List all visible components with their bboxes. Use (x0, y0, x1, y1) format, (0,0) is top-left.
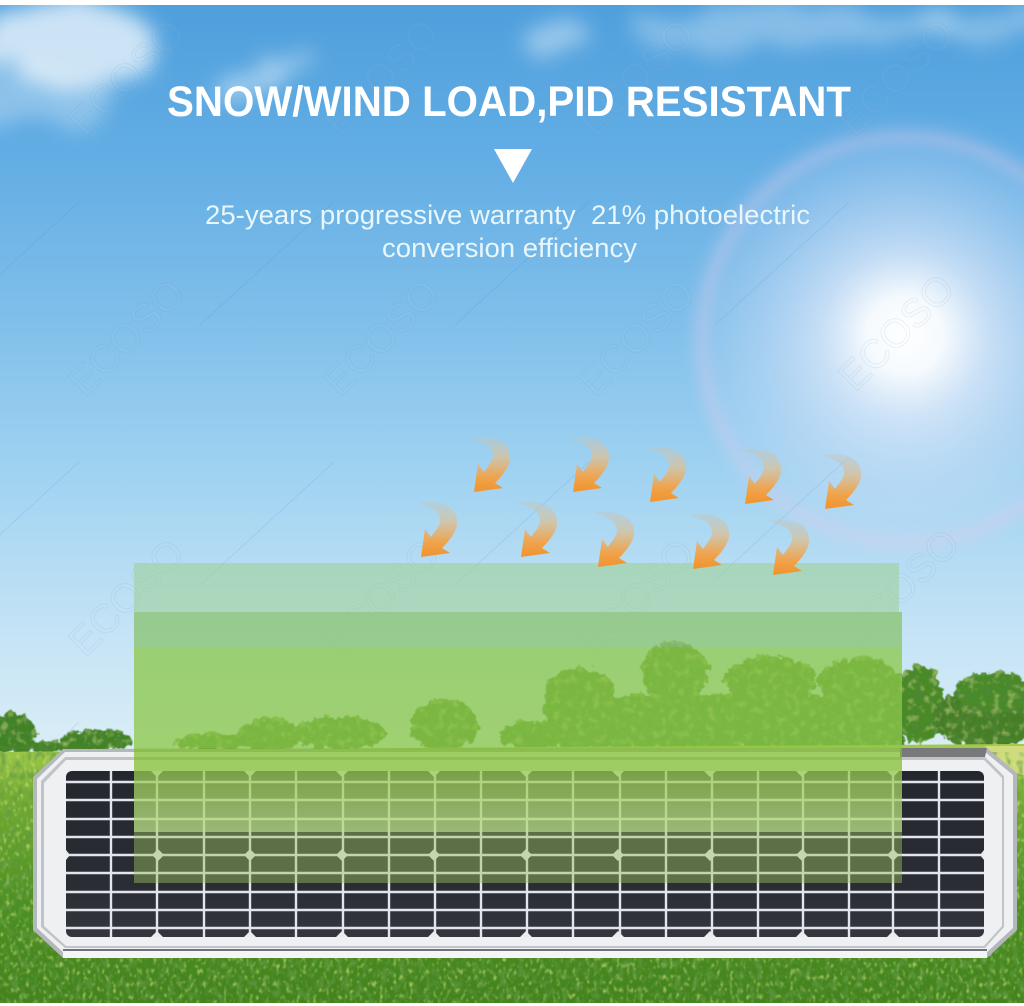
title: SNOW/WIND LOAD,PID RESISTANT (167, 78, 851, 126)
subtitle: conversion efficiency (382, 233, 638, 263)
icon: down triangle (494, 149, 532, 183)
subtitle: 25-years progressive warranty 21% photoelectric (205, 200, 810, 230)
panel frame (33, 748, 1017, 958)
grid lines (66, 771, 984, 937)
orange wind arrows (417, 437, 861, 575)
sun (680, 110, 1024, 560)
green translucent overlay (134, 563, 902, 883)
sky background (0, 3, 1024, 755)
grass field (0, 744, 1024, 1003)
grid nodes (66, 771, 984, 937)
sun halo (680, 110, 1024, 560)
solar cells (66, 771, 984, 937)
distant trees (0, 642, 1024, 753)
clouds (0, 3, 1024, 130)
watermarks (0, 11, 969, 845)
solar panel (33, 748, 1017, 958)
subtitle (205, 200, 810, 263)
bottom white edge (0, 1003, 1024, 1006)
